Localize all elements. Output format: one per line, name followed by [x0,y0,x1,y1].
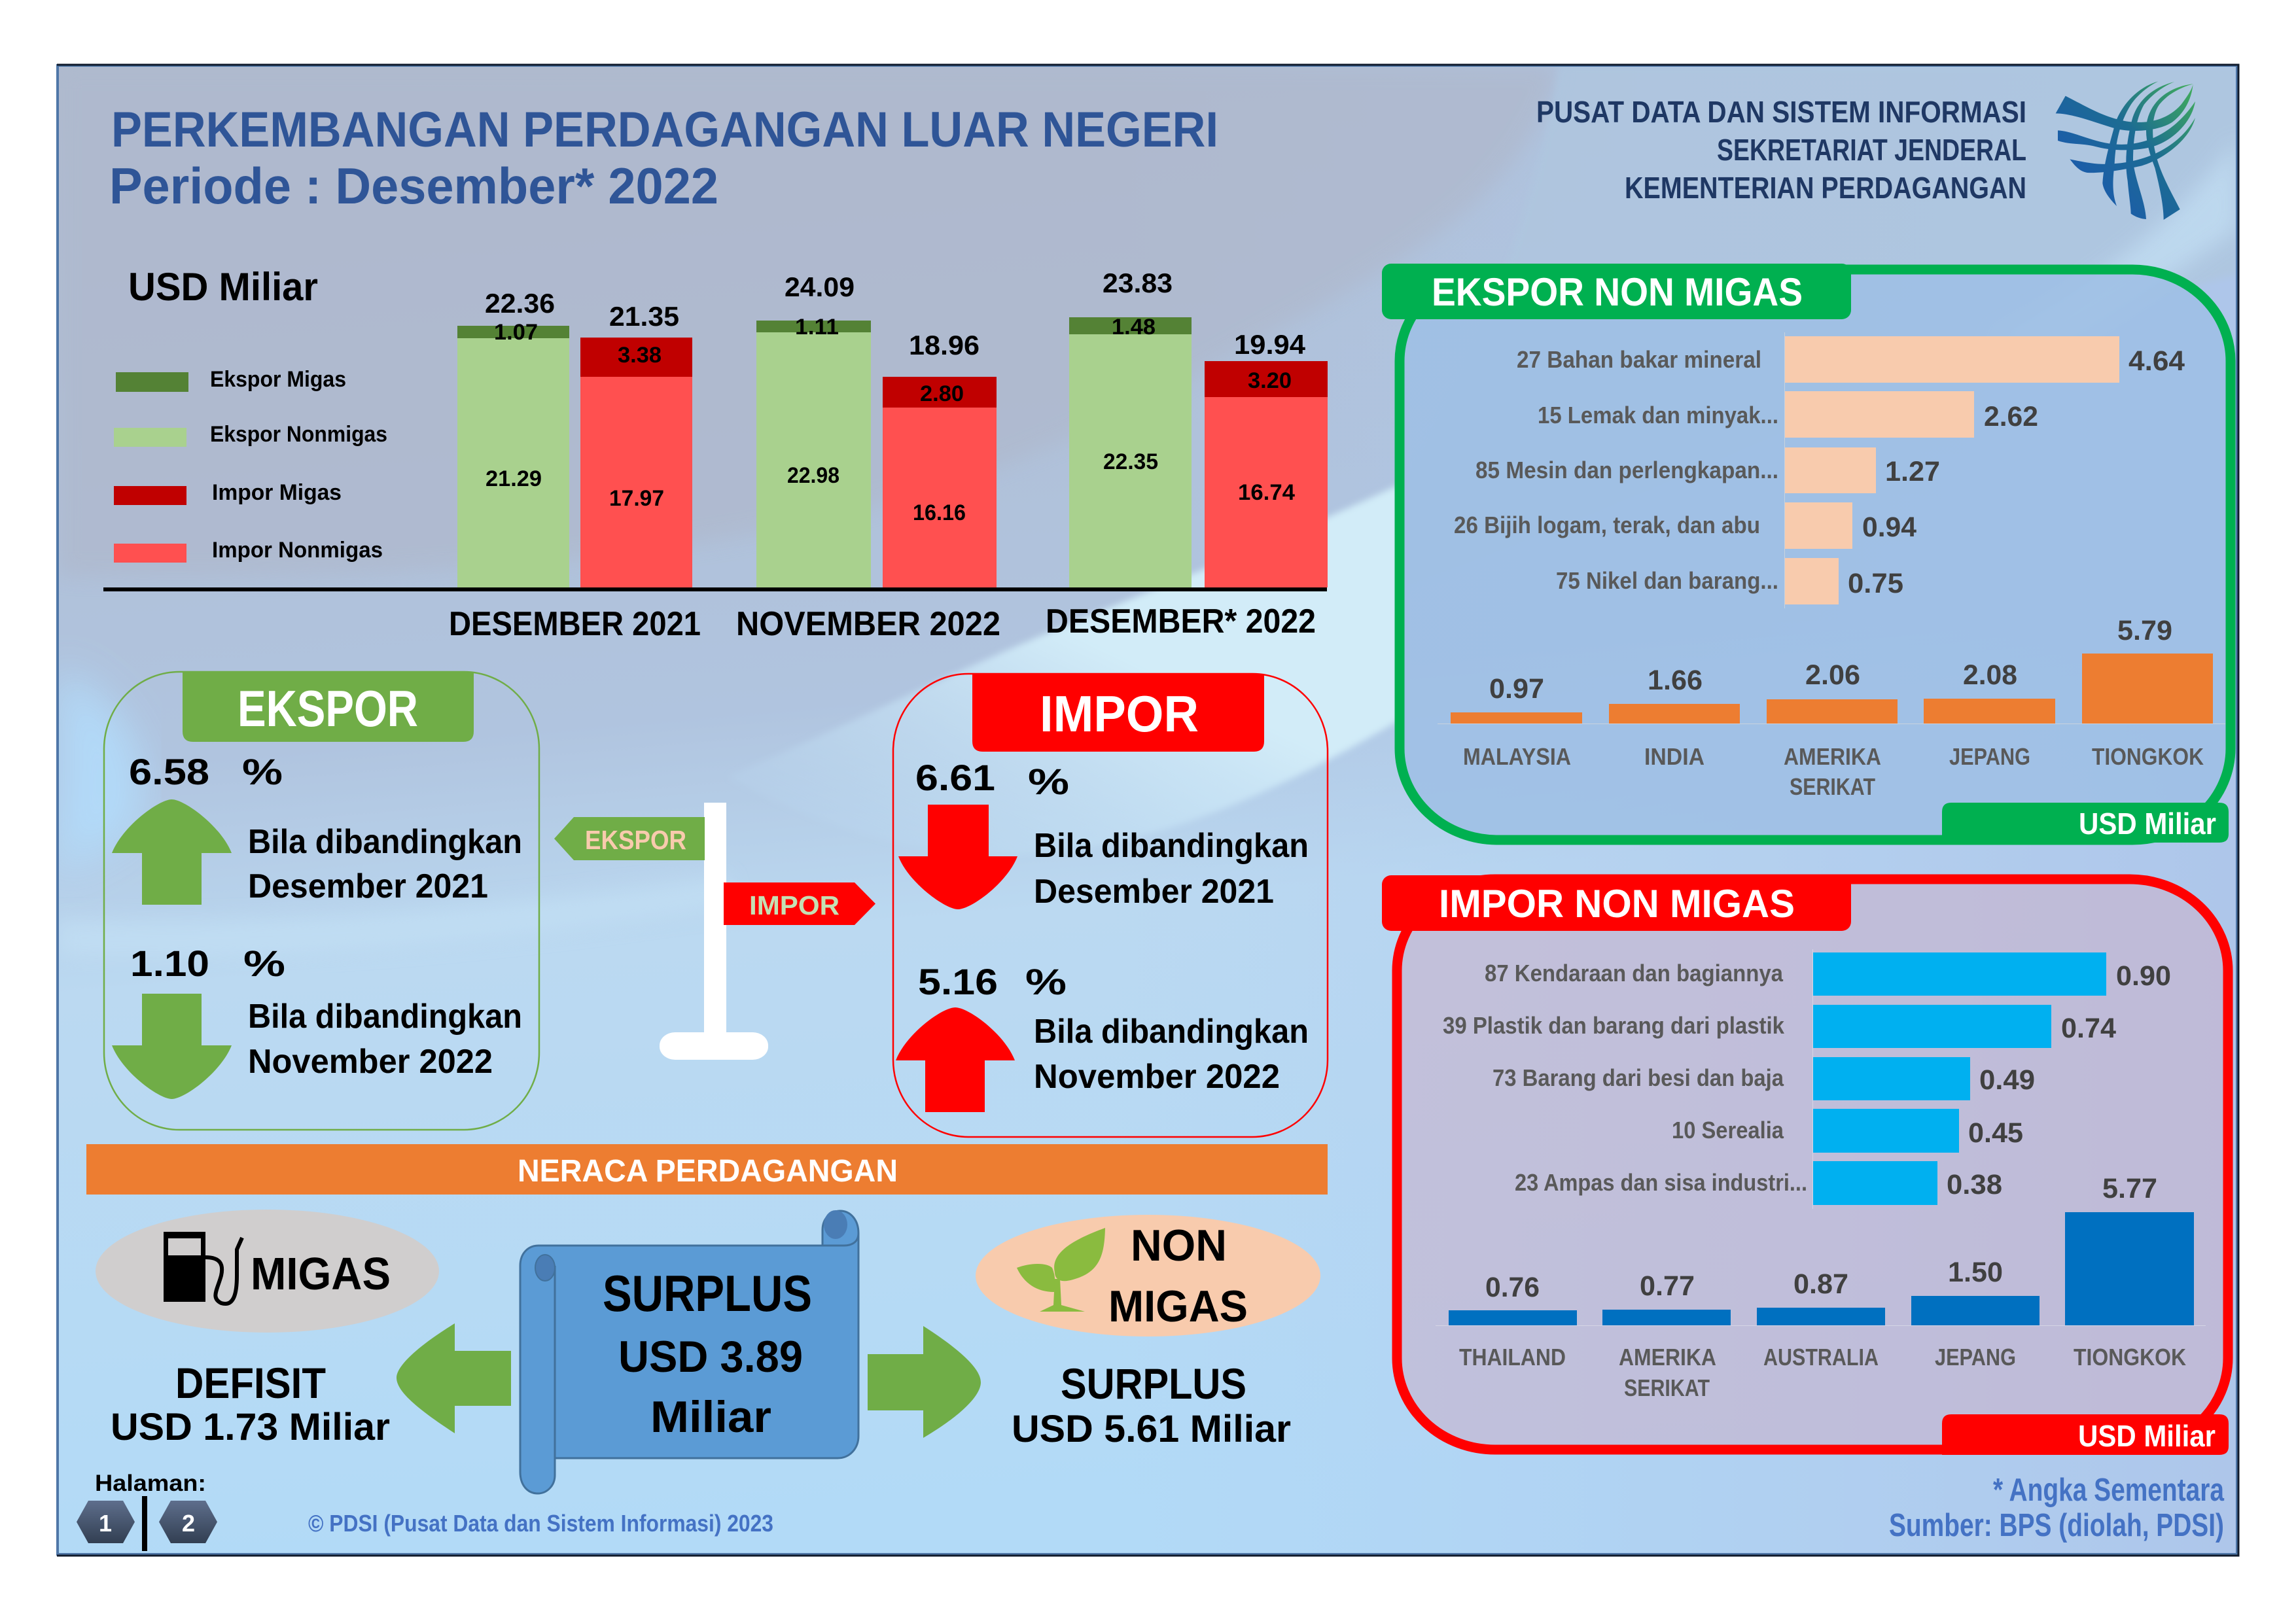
panel: impor: Bila dibandingkan [1034,1013,1309,1051]
column chart: negara tujuan ekspor: JEPANG [1949,743,2030,770]
column chart: negara asal impor: 5.77 [2102,1173,2157,1204]
panel: ekspor non migas [1382,264,2231,843]
panel: impor: November 2022 [1034,1058,1280,1096]
legend: Impor Migas [212,480,342,505]
legend: Impor Nonmigas [212,538,383,563]
bar chart: komoditas ekspor: 0.94 [1862,512,1916,543]
panel: impor: % [1028,761,1069,802]
bar chart: komoditas impor: 87 Kendaraan dan bagiannya [1485,960,1784,986]
scroll: total surplus: Miliar [650,1392,771,1442]
unit label: USD Miliar: USD Miliar [128,265,318,309]
organisation heading: KEMENTERIAN PERDAGANGAN [1625,171,2026,205]
panel: ekspor: Bila dibandingkan [248,823,522,861]
bar chart: komoditas ekspor: 1.27 [1885,456,1940,487]
panel: ekspor non migas: USD Miliar [2079,807,2216,841]
column chart: negara asal impor: 0.87 [1793,1268,1848,1300]
organisation heading: PUSAT DATA DAN SISTEM INFORMASI [1536,95,2026,129]
column chart: negara asal impor: AMERIKA [1619,1344,1716,1370]
bar chart: komoditas impor [1443,949,2171,1209]
organisation heading [1536,95,2026,205]
bar chart: komoditas ekspor: 85 Mesin dan perlengkapan... [1475,457,1778,483]
column chart: negara tujuan ekspor: 0.97 [1489,673,1544,705]
column chart: negara asal impor: TIONGKOK [2074,1344,2186,1370]
stacked bar chart: DESEMBER* 2022 [1046,602,1316,640]
panel: impor: IMPOR [1040,685,1199,742]
scroll: total surplus: SURPLUS [603,1265,812,1322]
panel: impor: Bila dibandingkan [1034,827,1309,865]
scroll: total surplus [520,1210,858,1493]
bar chart: komoditas ekspor: 26 Bijih logam, terak, dan abu [1454,512,1760,538]
non migas block: MIGAS [1108,1282,1248,1331]
panel: impor non migas: USD Miliar [2078,1419,2216,1453]
stacked bar chart: DESEMBER 2021 [449,605,701,643]
stacked bar chart: 22.36 [485,288,555,319]
banner: neraca perdagangan: NERACA PERDAGANGAN [518,1154,898,1189]
panel: impor non migas [1382,875,2229,1455]
stacked bar chart: 2.80 [920,381,964,406]
pagination: Halaman: [95,1471,206,1496]
stacked bar chart: 1.07 [494,320,538,345]
arrow: migas [397,1323,511,1433]
bar chart: komoditas impor: 0.74 [2061,1013,2116,1044]
bar chart: komoditas impor: 10 Serealia [1672,1117,1784,1143]
column chart: negara tujuan ekspor [1438,615,2225,800]
column chart: negara tujuan ekspor: 5.79 [2117,615,2172,646]
panel: impor [893,674,1328,1137]
bar chart: komoditas impor: 0.49 [1979,1064,2035,1096]
banner: neraca perdagangan [86,1144,1328,1195]
stacked bar chart: 21.29 [486,466,542,491]
title [109,102,1218,215]
icon: signpost: EKSPOR [585,825,686,855]
column chart: negara tujuan ekspor: TIONGKOK [2092,743,2204,770]
bar chart: komoditas ekspor: 2.62 [1984,401,2038,432]
panel: ekspor: November 2022 [248,1043,493,1081]
panel: ekspor: EKSPOR [238,680,418,737]
panel: ekspor [104,672,539,1130]
column chart: negara asal impor: SERIKAT [1624,1374,1710,1401]
panel: ekspor: Desember 2021 [248,867,488,905]
pagination: 1 [99,1510,112,1537]
title: PERKEMBANGAN PERDAGANGAN LUAR NEGERI [111,102,1218,158]
column chart: negara asal impor: 1.50 [1948,1257,2003,1288]
migas block: USD 1.73 Miliar [111,1406,390,1448]
bar chart: komoditas ekspor: 4.64 [2128,345,2185,377]
panel: impor: 5.16 [918,961,998,1002]
migas block [96,1210,439,1448]
bar chart: komoditas impor: 0.45 [1968,1117,2023,1149]
bar chart: komoditas impor: 23 Ampas dan sisa industri... [1515,1169,1807,1196]
bar chart: komoditas ekspor [1454,332,2185,608]
bar chart: komoditas impor: 73 Barang dari besi dan baja [1492,1064,1784,1091]
organisation heading: SEKRETARIAT JENDERAL [1717,133,2026,167]
panel: impor: % [1025,961,1067,1002]
column chart: negara asal impor: AUSTRALIA [1763,1344,1879,1370]
non migas block: NON [1131,1221,1227,1270]
migas block: DEFISIT [175,1359,326,1407]
panel: impor: Desember 2021 [1034,873,1274,911]
bar chart: komoditas impor: 0.90 [2116,960,2171,992]
stacked bar chart: 22.35 [1103,449,1158,474]
stacked bar chart: 22.98 [787,463,839,488]
non migas block: USD 5.61 Miliar [1012,1408,1291,1450]
column chart: negara asal impor [1436,1173,2206,1401]
pagination [77,1471,217,1551]
column chart: negara tujuan ekspor: MALAYSIA [1463,743,1571,770]
stacked bar chart: 17.97 [609,486,664,511]
migas block: MIGAS [251,1248,391,1299]
stacked bar chart: 19.94 [1234,329,1306,360]
stacked bar chart: NOVEMBER 2022 [736,605,1000,643]
icon: signpost: IMPOR [749,890,839,920]
non migas block [976,1215,1320,1450]
bar chart: komoditas impor: 39 Plastik dan barang dari plastik [1443,1012,1785,1039]
stacked bar chart: 3.38 [618,343,662,368]
stacked bar chart: 16.16 [913,500,966,525]
legend: Ekspor Migas [210,367,346,392]
panel: ekspor: Bila dibandingkan [248,998,522,1036]
panel: ekspor: % [242,751,283,792]
bar chart: komoditas ekspor: 15 Lemak dan minyak... [1538,402,1778,428]
column chart: negara asal impor: THAILAND [1459,1344,1566,1370]
stacked bar chart: 21.35 [609,301,679,332]
panel: ekspor non migas: EKSPOR NON MIGAS [1432,270,1803,314]
panel: impor: 6.61 [915,757,995,798]
column chart: negara asal impor: 0.76 [1485,1272,1540,1303]
panel: ekspor: % [243,943,285,984]
column chart: negara tujuan ekspor: SERIKAT [1790,773,1875,800]
pagination: 2 [182,1510,195,1537]
legend [114,367,387,563]
column chart: negara tujuan ekspor: INDIA [1644,743,1704,770]
stacked bar chart: 18.96 [909,330,980,360]
bar chart: komoditas ekspor: 27 Bahan bakar mineral [1517,346,1761,373]
panel: ekspor: 1.10 [130,943,209,984]
icon: ministry logo [2056,81,2195,220]
bar chart: komoditas ekspor: 0.75 [1848,568,1903,599]
stacked bar chart: 23.83 [1103,268,1173,298]
column chart: negara tujuan ekspor: 2.06 [1805,659,1860,691]
arrow: non migas [868,1326,981,1438]
stacked bar chart [103,268,1328,643]
icon: signpost [554,803,875,1060]
footnote [1889,1473,2225,1543]
footnote: * Angka Sementara [1993,1473,2225,1508]
stacked bar chart: 16.74 [1238,480,1295,505]
column chart: negara tujuan ekspor: 1.66 [1648,665,1703,696]
stacked bar chart: 3.20 [1248,368,1292,393]
title: Periode : Desember* 2022 [109,157,718,215]
stacked bar chart: 1.11 [795,315,839,340]
bar chart: komoditas ekspor: 75 Nikel dan barang... [1556,567,1778,594]
non migas block: SURPLUS [1061,1359,1246,1408]
panel: ekspor: 6.58 [129,751,209,792]
panel: impor non migas: IMPOR NON MIGAS [1439,882,1795,926]
column chart: negara asal impor: 0.77 [1640,1270,1695,1302]
legend: Ekspor Nonmigas [210,422,387,447]
column chart: negara asal impor: JEPANG [1935,1344,2016,1370]
bar chart: komoditas impor: 0.38 [1947,1169,2002,1200]
copyright: © PDSI (Pusat Data dan Sistem Informasi) 2023 [308,1510,773,1537]
column chart: negara tujuan ekspor: AMERIKA [1784,743,1881,770]
stacked bar chart: 24.09 [785,271,855,302]
scroll: total surplus: USD 3.89 [618,1332,803,1382]
column chart: negara tujuan ekspor: 2.08 [1963,659,2017,691]
stacked bar chart: 1.48 [1112,315,1156,340]
